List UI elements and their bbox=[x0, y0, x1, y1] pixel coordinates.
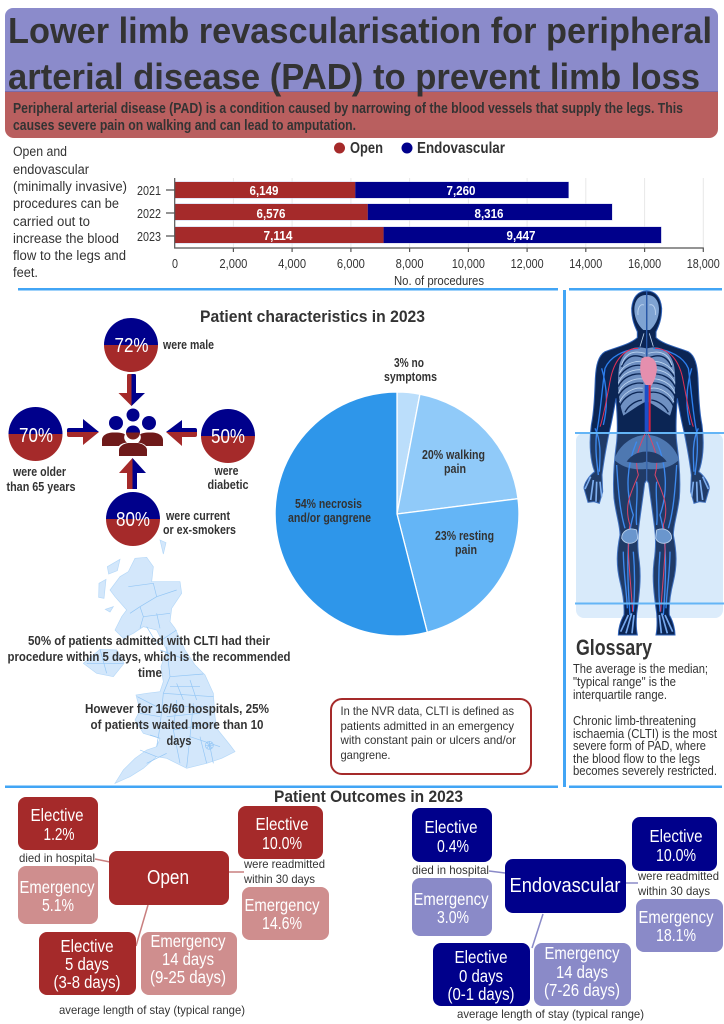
stat: 50% diabetic: 50% bbox=[211, 425, 245, 448]
heading: patient characteristics: Patient characteristics in 2023 bbox=[200, 307, 425, 326]
open: emergency mortality bbox=[18, 866, 98, 924]
endovascular: elective length of stay: 0 days bbox=[459, 966, 503, 986]
endovascular: emergency readmission bbox=[636, 899, 723, 952]
glossary text: interquartile range. bbox=[573, 688, 667, 702]
text: CLTI procedure timing bbox=[8, 634, 290, 680]
text: procedures description: carried out to bbox=[13, 214, 90, 229]
pie label: no symptoms: 3% no bbox=[394, 356, 424, 370]
text: procedures description bbox=[13, 144, 127, 280]
endovascular: emergency mortality: 3.0% bbox=[437, 907, 469, 927]
stacked bar chart: procedures per year: 4,000 bbox=[278, 256, 306, 271]
stat: 72% male: were male bbox=[162, 338, 214, 352]
stacked bar chart: procedures per year: 7,114 bbox=[264, 228, 293, 243]
stacked bar chart: procedures per year: 7,260 bbox=[446, 183, 476, 198]
text: procedures description: flow to the legs and bbox=[13, 248, 126, 263]
open: emergency length of stay: (9-25 days) bbox=[150, 967, 226, 987]
open: emergency readmission: Emergency bbox=[244, 895, 320, 915]
open: elective length of stay bbox=[39, 932, 136, 995]
text: hospital waits: However for 16/60 hospitals, 25% bbox=[85, 702, 269, 716]
endovascular: emergency length of stay bbox=[534, 943, 631, 1006]
endovascular centre node bbox=[505, 859, 626, 913]
callout: CLTI definition: patients admitted in an emergency bbox=[340, 719, 514, 733]
endovascular: readmitted label: within 30 days bbox=[637, 884, 710, 898]
stat: 80% current or ex-smokers: 80% bbox=[116, 508, 150, 531]
heading: patient outcomes: Patient Outcomes in 2023 bbox=[274, 787, 463, 806]
open: elective length of stay: Elective bbox=[60, 936, 114, 956]
stacked bar chart: procedures per year: No. of procedures bbox=[394, 273, 484, 288]
panel: highlight band lines bbox=[575, 432, 724, 604]
stacked bar chart: procedures per year: 6,149 bbox=[250, 183, 278, 198]
stat: 80% current or ex-smokers: or ex-smokers bbox=[163, 523, 236, 537]
stat: 70% older than 65: than 65 years bbox=[6, 480, 76, 494]
open: readmitted label bbox=[243, 857, 325, 886]
stacked bar chart: procedures per year: 8,316 bbox=[474, 206, 504, 221]
callout: CLTI definition: gangrene. bbox=[340, 748, 390, 762]
text: procedures description: endovascular bbox=[13, 162, 89, 177]
glossary text: "typical range" is the bbox=[573, 675, 676, 689]
text: CLTI procedure timing: time bbox=[138, 666, 162, 680]
chart legend: Open bbox=[350, 140, 383, 157]
stacked bar chart: procedures per year: 2,000 bbox=[219, 256, 247, 271]
text: procedures description: feet. bbox=[13, 265, 38, 280]
stacked bar chart: procedures per year: 0 bbox=[172, 256, 178, 271]
pie label: no symptoms bbox=[384, 356, 437, 384]
intro text: causes severe pain on walking and can lead to amputation. bbox=[13, 118, 356, 134]
endovascular: elective readmission: Elective bbox=[650, 826, 702, 846]
endovascular: elective mortality: Elective bbox=[424, 817, 478, 837]
stat: 50% diabetic: were bbox=[214, 464, 239, 478]
text: CLTI procedure timing: procedure within 5 days, which is the recommended bbox=[8, 650, 290, 664]
glossary heading: Glossary bbox=[576, 635, 653, 660]
endovascular: elective mortality: 0.4% bbox=[437, 836, 469, 856]
text: CLTI procedure timing: 50% of patients admitted with CLTI had their bbox=[28, 634, 270, 648]
stat: 70% older than 65: were older bbox=[12, 465, 66, 479]
open: emergency mortality: 5.1% bbox=[42, 895, 74, 915]
intro text bbox=[13, 101, 683, 134]
icon: group of patients bbox=[102, 408, 163, 456]
stat: 50% diabetic bbox=[201, 409, 255, 492]
stacked bar chart: procedures per year: 8,000 bbox=[396, 256, 424, 271]
open: elective readmission bbox=[238, 806, 323, 859]
open: length of stay label: average length of stay (typical range) bbox=[59, 1003, 245, 1017]
stacked bar chart: procedures per year: 6,000 bbox=[337, 256, 365, 271]
endovascular: emergency readmission: 18.1% bbox=[656, 925, 696, 945]
endovascular: elective length of stay bbox=[433, 943, 530, 1006]
arrow: top bbox=[118, 374, 145, 406]
endovascular: emergency mortality: Emergency bbox=[414, 889, 489, 909]
illustration: human body circulatory system bbox=[584, 291, 709, 635]
chart legend: Endovascular bbox=[417, 140, 505, 157]
pie label: walking pain: pain bbox=[444, 462, 466, 476]
stat: 80% current or ex-smokers bbox=[106, 492, 236, 546]
stacked bar chart: procedures per year: 2022 bbox=[137, 206, 161, 221]
pie label: necrosis and gangrene: and/or gangrene bbox=[288, 511, 371, 525]
pie label: walking pain: 20% walking bbox=[422, 448, 485, 462]
stacked bar chart: procedures per year: 12,000 bbox=[511, 256, 544, 271]
title banner bbox=[5, 8, 718, 138]
open: elective mortality bbox=[18, 797, 98, 850]
endovascular: readmitted label bbox=[637, 869, 719, 898]
endovascular: length of stay label: average length of stay (typical range) bbox=[457, 1007, 644, 1021]
callout: CLTI definition: In the NVR data, CLTI is defined as bbox=[340, 704, 514, 718]
stat: 70% older than 65 bbox=[6, 407, 76, 494]
endovascular: elective length of stay: Elective bbox=[454, 947, 508, 967]
endovascular: elective length of stay: (0-1 days) bbox=[448, 984, 514, 1004]
endovascular: emergency length of stay: (7-26 days) bbox=[544, 980, 620, 1000]
open centre node bbox=[109, 851, 229, 905]
pie chart: symptoms bbox=[275, 356, 519, 636]
panel: endovascular outcomes bbox=[412, 808, 723, 1021]
arrow: bottom bbox=[119, 458, 146, 489]
text: hospital waits bbox=[85, 702, 269, 748]
panel: lower body highlight bbox=[576, 433, 723, 618]
open: readmitted label: within 30 days bbox=[243, 872, 315, 886]
glossary text bbox=[573, 662, 717, 778]
arrow: left bbox=[67, 419, 99, 445]
stat: 80% current or ex-smokers: were current bbox=[165, 509, 231, 523]
arrow: right bbox=[166, 420, 197, 446]
open: emergency length of stay: 14 days bbox=[162, 949, 214, 969]
pie label: necrosis and gangrene: 54% necrosis bbox=[295, 497, 362, 511]
endovascular: elective readmission bbox=[632, 817, 717, 871]
stat: 70% older than 65: 70% bbox=[19, 424, 53, 447]
stat: 72% male: 72% bbox=[114, 334, 148, 357]
stat: 72% male bbox=[104, 318, 214, 372]
glossary text: the blood flow to the legs bbox=[573, 752, 700, 766]
pie label: resting pain: pain bbox=[455, 543, 477, 557]
stacked bar chart: procedures per year: 2021 bbox=[137, 183, 161, 198]
text: procedures description: (minimally invasive) bbox=[13, 179, 127, 194]
stacked bar chart: procedures per year: 9,447 bbox=[506, 228, 536, 243]
endovascular centre node: Endovascular bbox=[510, 874, 621, 897]
endovascular: elective readmission: 10.0% bbox=[656, 845, 696, 865]
open: died in hospital label: died in hospital bbox=[19, 851, 95, 865]
pie label: walking pain bbox=[422, 448, 485, 476]
callout: CLTI definition: with constant pain or ulcers and/or bbox=[340, 733, 516, 747]
text: procedures description: procedures can be bbox=[13, 196, 119, 211]
open: emergency mortality: Emergency bbox=[20, 877, 95, 897]
pie label: resting pain bbox=[435, 529, 494, 557]
stat: 50% diabetic: diabetic bbox=[208, 478, 249, 492]
glossary text: The average is the median; bbox=[573, 662, 708, 676]
stacked bar chart: procedures per year: 14,000 bbox=[569, 256, 602, 271]
open centre node: Open bbox=[147, 866, 189, 889]
map: United Kingdom bbox=[83, 540, 235, 783]
open: elective readmission: Elective bbox=[256, 814, 308, 834]
pie label: resting pain: 23% resting bbox=[435, 529, 494, 543]
open: elective length of stay: (3-8 days) bbox=[54, 972, 120, 992]
stacked bar chart: procedures per year: 6,576 bbox=[256, 206, 286, 221]
open: elective mortality: Elective bbox=[30, 805, 84, 825]
open: elective mortality: 1.2% bbox=[44, 824, 74, 844]
endovascular: emergency mortality bbox=[412, 878, 492, 936]
endovascular: died in hospital label: died in hospital bbox=[412, 863, 489, 877]
text: procedures description: increase the blood bbox=[13, 231, 119, 246]
endovascular: emergency length of stay: Emergency bbox=[544, 943, 620, 963]
stacked bar chart: procedures per year: 10,000 bbox=[452, 256, 485, 271]
endovascular: elective mortality bbox=[412, 808, 492, 862]
open: elective readmission: 10.0% bbox=[262, 833, 302, 853]
endovascular: emergency length of stay: 14 days bbox=[556, 962, 608, 982]
text: procedures description: Open and bbox=[13, 144, 67, 159]
open: emergency length of stay bbox=[141, 931, 237, 995]
glossary text: severe form of PAD, where bbox=[573, 739, 706, 753]
open: elective length of stay: 5 days bbox=[65, 954, 109, 974]
stacked bar chart: procedures per year bbox=[137, 178, 720, 288]
chart legend bbox=[334, 140, 505, 157]
open: readmitted label: were readmitted bbox=[243, 857, 325, 871]
pie label: necrosis and gangrene bbox=[288, 497, 371, 525]
open: emergency readmission bbox=[242, 887, 329, 940]
endovascular: readmitted label: were readmitted bbox=[637, 869, 719, 883]
text: hospital waits: days bbox=[166, 734, 192, 748]
title banner: arterial disease (PAD) to prevent limb loss bbox=[8, 56, 700, 97]
text: hospital waits: of patients waited more than 10 bbox=[90, 718, 264, 732]
open: emergency length of stay: Emergency bbox=[150, 931, 226, 951]
glossary text: Chronic limb-threatening bbox=[573, 714, 696, 728]
pie label: no symptoms: symptoms bbox=[384, 370, 437, 384]
panel: open outcomes bbox=[18, 797, 329, 1017]
stacked bar chart: procedures per year: 16,000 bbox=[628, 256, 661, 271]
stacked bar chart: procedures per year: 2023 bbox=[137, 229, 161, 244]
open: emergency readmission: 14.6% bbox=[262, 913, 302, 933]
callout: CLTI definition bbox=[331, 699, 531, 774]
